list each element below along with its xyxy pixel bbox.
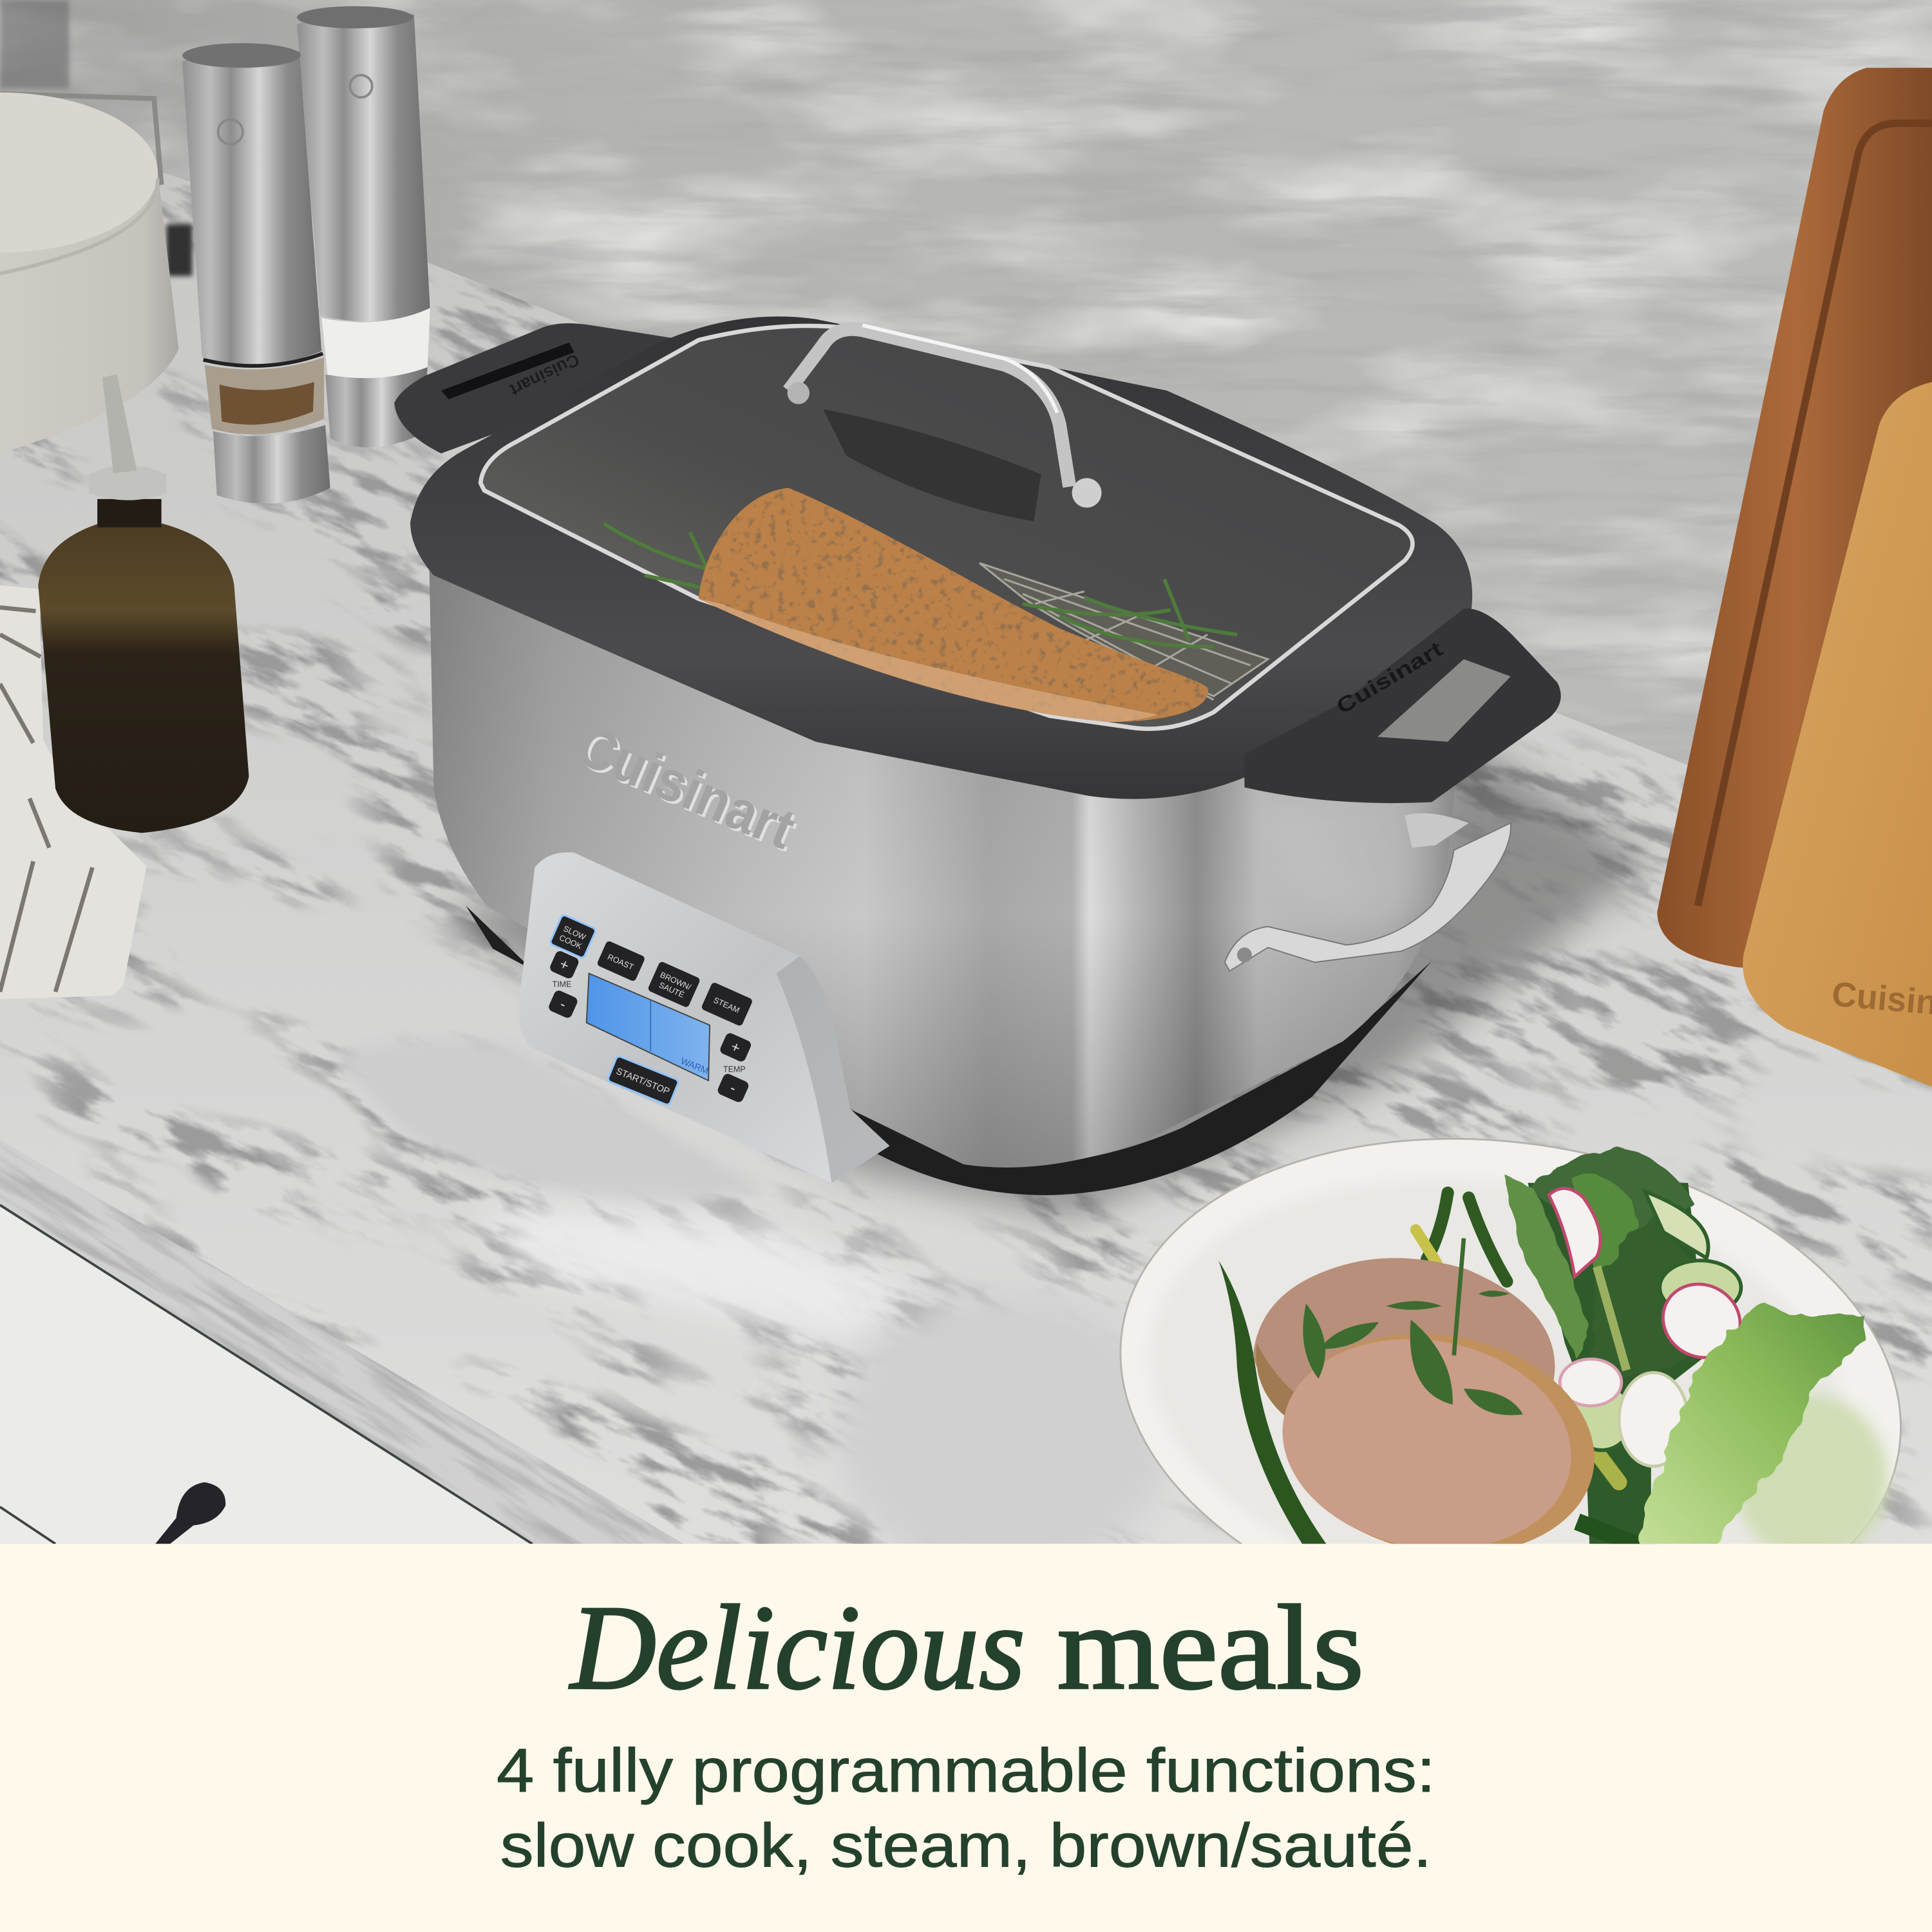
reflection: bright patch <box>475 1211 918 1337</box>
long green bean <box>1218 1260 1331 1550</box>
right lid handle <box>1244 609 1561 803</box>
buttons: SAUTÉ <box>658 980 686 999</box>
green beans <box>1427 1193 1507 1282</box>
title: Delicious <box>569 1580 1025 1714</box>
LCD display <box>587 973 710 1081</box>
reflection: panel shadow on counter <box>333 1040 764 1208</box>
plate <box>1084 1085 1932 1695</box>
left lid handle: Cuisinart <box>507 350 582 400</box>
buttons: - <box>558 996 569 1012</box>
left lettuce leaf <box>1507 1177 1587 1360</box>
glass lid <box>480 325 1412 729</box>
right lid handle: Cuisinart <box>1332 637 1446 719</box>
romaine leaf <box>1635 1301 1864 1550</box>
pepper mill: front left <box>182 43 330 504</box>
cucumber slices <box>1571 1191 1741 1450</box>
description text: 4 fully programmable functions: <box>497 1736 1435 1805</box>
lid handle <box>788 325 1101 507</box>
caption panel <box>0 1544 1932 1932</box>
white pot <box>0 92 192 453</box>
cooker base <box>466 905 1432 1195</box>
front pork slice <box>1265 1310 1612 1578</box>
buttons: BROWN/ <box>659 971 693 992</box>
buttons: - <box>728 1079 739 1097</box>
cutting board: bamboo <box>1743 382 1932 1086</box>
countertop <box>0 117 1932 1581</box>
description text: slow cook, steam, brown/sauté. <box>500 1812 1432 1880</box>
drawer knob <box>155 1482 225 1544</box>
dark rim <box>410 316 1472 799</box>
multicooker <box>394 316 1561 1195</box>
wall <box>0 0 1932 765</box>
salad backing greens <box>1528 1183 1707 1544</box>
side steel handle <box>1225 764 1511 971</box>
roast <box>699 488 1208 722</box>
title: meals <box>1057 1580 1364 1714</box>
plate inner shading <box>1117 1130 1877 1654</box>
reflection: plate shadow <box>825 1289 1159 1544</box>
title <box>569 1580 1364 1714</box>
buttons: STEAM <box>712 996 741 1015</box>
steel body <box>429 542 1466 1168</box>
embossed brand: Cuisinart <box>571 715 806 864</box>
steam basket <box>980 563 1268 700</box>
dark top lettuce <box>1528 1148 1693 1238</box>
counter front edge <box>0 1140 684 1544</box>
oil bottle <box>38 375 249 833</box>
buttons: SLOW <box>562 924 587 942</box>
mint garnish <box>1303 1291 1523 1415</box>
plate green reflection <box>1735 1395 1888 1562</box>
dark lower lettuce <box>1589 1214 1699 1380</box>
description text <box>497 1736 1435 1880</box>
buttons: + <box>557 955 572 974</box>
radish slices <box>1549 1188 1754 1466</box>
control panel <box>518 853 889 1183</box>
buttons <box>547 914 753 1106</box>
left lid handle <box>394 323 685 453</box>
handle reflection <box>823 409 1041 521</box>
middle lettuce <box>1571 1173 1645 1318</box>
buttons: ROAST <box>606 952 635 972</box>
cooker cast shadow <box>444 739 1651 1220</box>
control panel: WARM <box>679 1056 710 1077</box>
herbs <box>604 524 1237 647</box>
embossed brand: Cuisinart <box>568 713 804 861</box>
buttons: COOK <box>558 933 583 951</box>
buttons: + <box>728 1037 743 1057</box>
white cabinet drawer <box>0 1205 533 1544</box>
pepper mill: back right <box>297 6 430 448</box>
buttons: TEMP <box>723 1065 746 1074</box>
plate of food <box>1084 1085 1932 1695</box>
cutting board: dark wood <box>1657 68 1932 986</box>
buttons: TIME <box>553 980 571 989</box>
back pork slice <box>1253 1258 1555 1423</box>
kitchen towel <box>0 585 147 999</box>
buttons: START/STOP <box>614 1066 671 1097</box>
